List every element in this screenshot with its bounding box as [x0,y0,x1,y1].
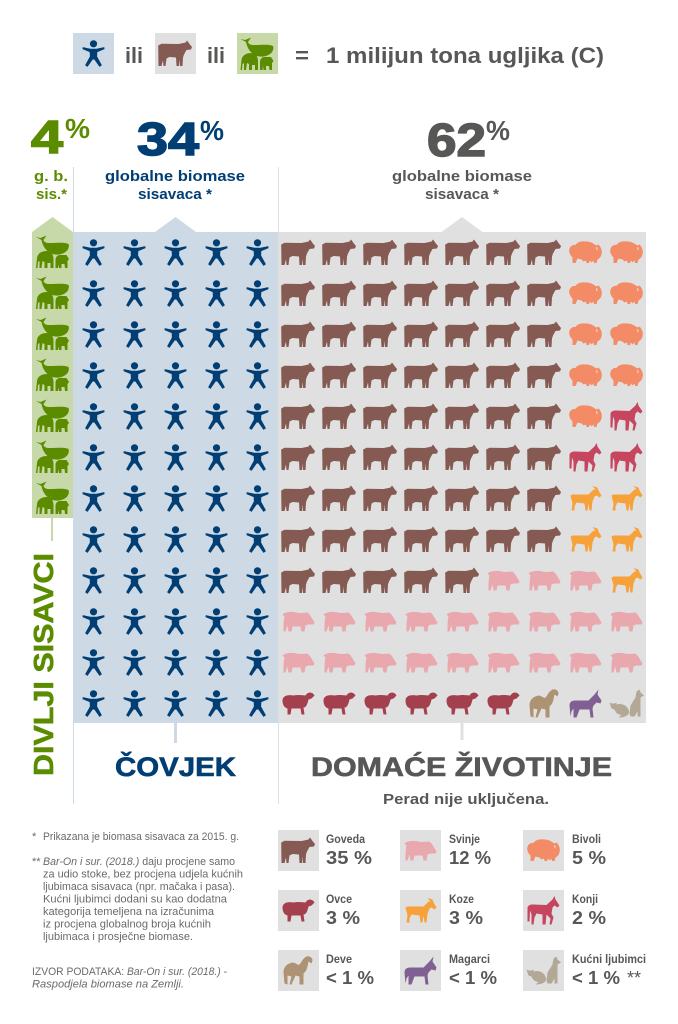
key: donkeys: < 1 % [449,967,497,988]
stat: humans 34% [105,113,245,203]
stat: livestock 62%: globalne biomase [392,168,532,185]
key: cattle: Goveda [326,834,366,846]
heading: domestic animals: DOMAĆE ŽIVOTINJE [311,751,612,782]
key: horses: 2 % [572,907,606,928]
heading: wild mammals: DIVLJI SISAVCI [28,553,59,776]
icon: wild mammals [237,33,278,74]
stat: wild mammals 4% [31,111,90,203]
footnotes: kategorija temeljena na izračunima [43,906,215,918]
legend equation: ili [125,43,143,68]
key: pets: < 1 % [572,967,620,988]
key: pets: ** [627,968,641,988]
icon: cow [155,33,196,74]
footnotes: ** [32,856,41,868]
key: buffalo: Bivoli [572,834,601,846]
stat: livestock 62%: sisavaca * [425,186,499,203]
key: camels: < 1 % [326,967,374,988]
stat: wild mammals 4%: % [65,113,90,144]
footnotes: ljubimaca sisavaca (npr. mačaka i pasa). [43,881,235,893]
key: horses: Konji [572,894,598,906]
legend equation: = [295,43,309,68]
legend equation: ili [207,43,225,68]
stat: humans 34%: sisavaca * [138,186,212,203]
stat: humans 34%: 34 [137,113,199,165]
key: buffalo [523,830,606,871]
stat: wild mammals 4%: g. b. [34,168,68,185]
key: goats [400,890,483,931]
footnotes: ljubimaca i prosječne biomase. [43,931,193,943]
key: donkeys [400,950,497,991]
legend equation [73,33,604,74]
key: sheep [278,890,360,931]
key: cattle [278,830,372,871]
key: camels [278,950,374,991]
key: sheep: Ovce [326,894,352,906]
key: pigs [400,830,491,871]
footnotes: za udio stoke, bez procjena udjela kućnih [43,868,243,880]
stat: wild mammals 4%: 4 [31,111,64,163]
stat: humans 34%: globalne biomase [105,168,245,185]
source [32,966,227,990]
note: poultry: Perad nije uključena. [383,791,549,808]
stat: wild mammals 4%: sis.* [36,186,67,203]
stat: humans 34%: % [200,115,224,146]
key: camels: Deve [326,954,352,966]
key: cattle: 35 % [326,847,372,868]
key: donkeys: Magarci [449,954,490,966]
heading: humans: ČOVJEK [115,751,237,782]
panel: domestic animals [278,217,646,740]
key: pigs: 12 % [449,847,491,868]
footnotes: * [32,831,37,843]
panel: humans [73,217,278,743]
key: pets: Kućni ljubimci [572,954,646,966]
key: goats: Koze [449,894,474,906]
key: horses [523,890,606,931]
legend equation: 1 milijun tona ugljika (C) [326,43,604,68]
footnotes: Bar-On i sur. (2018.) daju procjene samo [43,856,235,868]
stat: livestock 62%: 62 [427,114,486,166]
key: buffalo: 5 % [572,847,606,868]
source: IZVOR PODATAKA: Bar-On i sur. (2018.) - [32,966,227,978]
panel: wild mammals [32,217,73,541]
source: Raspodjela biomase na Zemlji. [32,978,184,990]
key: goats: 3 % [449,907,483,928]
icon: human [73,33,114,74]
key: pigs: Svinje [449,834,480,846]
stat: livestock 62% [392,114,532,203]
key: pets [523,950,646,991]
stat: livestock 62%: % [486,115,510,146]
footnotes [32,831,243,943]
key: sheep: 3 % [326,907,360,928]
footnotes: Prikazana je biomasa sisavaca za 2015. g. [43,831,239,843]
footnotes: Kućni ljubimci dodani su kao dodatna [43,894,228,906]
footnotes: iz procjena globalnog broja kućnih [43,918,211,930]
